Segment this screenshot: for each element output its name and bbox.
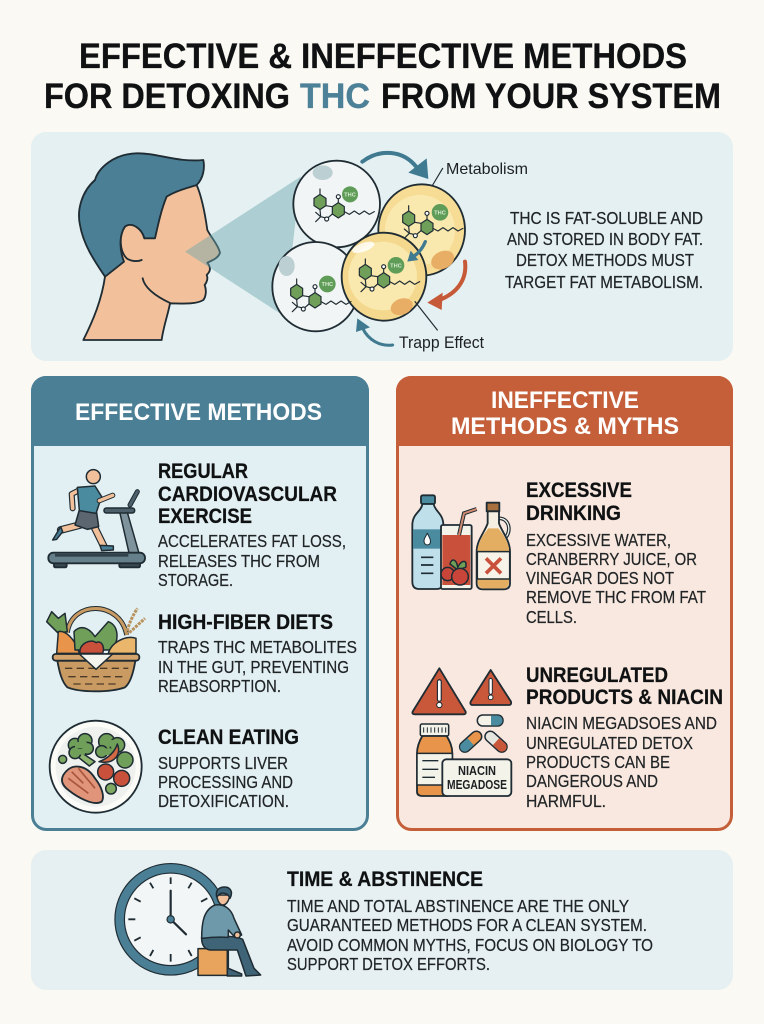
text: THC explanation: THC IS FAT-SOLUBLE AND	[510, 208, 703, 228]
title: THC	[300, 77, 370, 116]
text: cardio description: ACCELERATES FAT LOSS,	[158, 531, 346, 551]
icon: plate of food	[50, 721, 142, 813]
icon: fat cells	[272, 161, 465, 331]
heading: excessive drinking: EXCESSIVE	[526, 479, 632, 502]
icon: head profile	[79, 153, 220, 340]
label: niacin megadose	[447, 764, 507, 792]
text: drinking description: CRANBERRY JUICE, OR	[526, 549, 697, 569]
header: effective methods	[31, 376, 369, 446]
illustration: head and fat cells	[79, 153, 465, 345]
heading: regular cardiovascular exercise: REGULAR	[158, 460, 248, 483]
heading: excessive drinking: DRINKING	[526, 502, 621, 525]
text: abstinence description: TIME AND TOTAL ABSTINENCE ARE THE ONLY	[287, 896, 629, 916]
text: fiber description: REABSORPTION.	[158, 676, 281, 696]
text: fiber description: IN THE GUT, PREVENTING	[158, 657, 349, 677]
panel: ineffective methods and myths	[396, 376, 733, 830]
title: FOR DETOXING	[44, 77, 290, 116]
text: niacin description: PRODUCTS CAN BE	[526, 752, 670, 772]
heading: unregulated products and niacin: UNREGULATED	[526, 664, 668, 687]
item: cardio	[48, 460, 346, 590]
heading: time and abstinence: TIME & ABSTINENCE	[287, 868, 483, 891]
panel: time and abstinence	[31, 850, 733, 990]
item: excessive drinking	[412, 479, 706, 627]
title	[44, 37, 721, 116]
heading: unregulated products and niacin: PRODUCTS & NIACIN	[526, 686, 723, 709]
text: abstinence description: SUPPORT DETOX EFFORTS.	[287, 954, 490, 974]
text: drinking description: REMOVE THC FROM FAT	[526, 587, 706, 607]
label: niacin megadose: NIACIN	[458, 764, 496, 778]
header: effective methods: EFFECTIVE METHODS	[75, 399, 322, 426]
text: THC explanation: TARGET FAT METABOLISM.	[505, 272, 703, 292]
title: EFFECTIVE & INEFFECTIVE METHODS	[79, 37, 687, 76]
label: Metabolism: Metabolism	[446, 161, 528, 178]
text: clean eating description: DETOXIFICATION.	[158, 791, 289, 811]
icon: fat cells: THC	[344, 192, 356, 198]
text: THC explanation: DETOX METHODS MUST	[516, 250, 694, 270]
heading: unregulated products and niacin	[526, 664, 723, 709]
icon: fat cells: THC	[322, 282, 333, 288]
label: Trapp Effect: Trapp Effect	[399, 333, 484, 352]
icon: warnings, pills and niacin bottle	[412, 668, 511, 796]
text: fiber description	[158, 637, 357, 696]
text: niacin description	[526, 713, 717, 811]
text: niacin description: NIACIN MEGADSOES AND	[526, 713, 717, 733]
icon: food basket	[47, 608, 145, 691]
text: drinking description: CELLS.	[526, 607, 577, 627]
label: niacin megadose: MEGADOSE	[447, 778, 507, 792]
arrows: metabolism cycle	[356, 153, 465, 345]
text: abstinence description	[287, 896, 653, 974]
heading: regular cardiovascular exercise	[158, 460, 337, 528]
text: clean eating description: PROCESSING AND	[158, 772, 293, 792]
heading: excessive drinking	[526, 479, 632, 525]
header: ineffective methods and myths: INEFFECTIVE	[491, 387, 639, 414]
text: drinking description	[526, 530, 706, 627]
icon: clock and seated person	[120, 868, 261, 976]
text: drinking description: VINEGAR DOES NOT	[526, 568, 674, 588]
item: high-fiber diets	[47, 608, 357, 696]
text: abstinence description: GUARANTEED METHODS FOR A CLEAN SYSTEM.	[287, 915, 647, 935]
icon: fat cells: THC	[434, 210, 446, 216]
text: fiber description: TRAPS THC METABOLITES	[158, 637, 357, 657]
text: cardio description	[158, 531, 346, 590]
text: clean eating description	[158, 753, 293, 811]
heading: high-fiber diets: HIGH-FIBER DIETS	[158, 611, 333, 634]
text: drinking description: EXCESSIVE WATER,	[526, 530, 671, 550]
icon: fat cells: THC	[390, 263, 402, 269]
text: niacin description: HARMFUL.	[526, 791, 606, 811]
icon: water, juice, vinegar	[412, 495, 510, 589]
text: cardio description: STORAGE.	[158, 570, 233, 590]
text: THC explanation: AND STORED IN BODY FAT.	[507, 229, 703, 249]
title: FROM YOUR SYSTEM	[381, 77, 721, 116]
panel: effective methods	[31, 376, 369, 830]
item: unregulated products and niacin	[412, 664, 723, 811]
text: niacin description: UNREGULATED DETOX	[526, 733, 693, 753]
item: clean eating	[50, 721, 299, 813]
heading: regular cardiovascular exercise: CARDIOVASCULAR	[158, 483, 337, 506]
text: THC explanation	[505, 208, 703, 292]
text: cardio description: RELEASES THC FROM	[158, 551, 320, 571]
text: abstinence description: AVOID COMMON MYTHS, FOCUS ON BIOLOGY TO	[287, 935, 653, 955]
text: clean eating description: SUPPORTS LIVER	[158, 753, 288, 773]
panel: THC storage intro	[31, 132, 733, 361]
heading: regular cardiovascular exercise: EXERCISE	[158, 505, 252, 528]
header: ineffective methods and myths	[396, 376, 733, 446]
icon: runner on treadmill	[48, 470, 145, 567]
heading: clean eating: CLEAN EATING	[158, 726, 299, 749]
header: ineffective methods and myths: METHODS & MYTHS	[451, 413, 679, 440]
text: niacin description: DANGEROUS AND	[526, 771, 658, 791]
zoom cone	[185, 177, 301, 316]
